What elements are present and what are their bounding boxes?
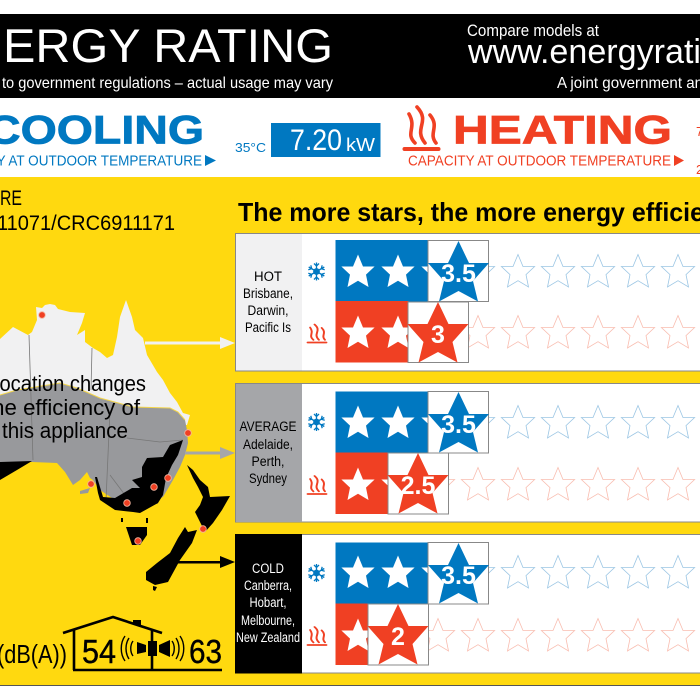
- cooling rating 3.5: [428, 240, 489, 302]
- Tasmania: [126, 527, 147, 545]
- heating heading: [408, 108, 684, 170]
- map: New Zealand: [146, 465, 230, 591]
- Bass Strait islands: [121, 518, 148, 523]
- hot zone: [0, 300, 190, 425]
- heating outline stars: [421, 468, 695, 500]
- state borders: [29, 335, 183, 505]
- cooling stars bar: [336, 240, 455, 302]
- location text: [0, 371, 146, 443]
- cold label: Hobart,: [250, 595, 286, 610]
- Kangaroo Island: [80, 488, 90, 494]
- panel: cold: [235, 534, 700, 674]
- average label: [240, 419, 296, 486]
- cooling capacity value: [235, 123, 380, 157]
- heating capacity label: CAPACITY AT OUTDOOR TEMPERATURE: [408, 153, 671, 170]
- hot label: [243, 269, 293, 335]
- north island: [187, 465, 230, 532]
- hot label: HOT: [254, 269, 282, 284]
- heating rating 2.5: [388, 453, 448, 514]
- heating temperatures cut off: [696, 124, 700, 177]
- cooling stars bar: [336, 392, 455, 453]
- icon: heat: [308, 476, 326, 494]
- heating rating 2.5: 2.5: [401, 472, 435, 500]
- outdoor noise: 63: [189, 633, 222, 670]
- cooling capacity value: 7.20: [290, 124, 342, 157]
- cold label: Canberra,: [244, 578, 292, 593]
- icon: snowflake: [308, 564, 325, 582]
- heating rating 2: [368, 604, 428, 665]
- icon: heat: [308, 627, 326, 645]
- heating stars bar: [336, 452, 415, 514]
- title: ERGY RATING: [3, 19, 333, 72]
- icon: snowflake: [308, 413, 325, 431]
- cooling rating 3.5: 3.5: [441, 411, 476, 439]
- arrow: average: [185, 447, 235, 459]
- cooling rating 3.5: [428, 392, 489, 453]
- arrow: cold: [177, 556, 235, 568]
- cold zone south east: [95, 440, 183, 513]
- heating arrow: [674, 155, 684, 166]
- average label: AVERAGE: [240, 419, 296, 434]
- heating stars bar: [336, 604, 375, 665]
- map: Australia: [0, 300, 190, 545]
- heating stars bar: [336, 301, 415, 362]
- icon: snowflake: [308, 262, 325, 280]
- location text: this appliance: [2, 418, 128, 443]
- model text: 11071/CRC6911171: [0, 212, 175, 235]
- cold label: COLD: [252, 561, 284, 576]
- cooling stars bar: [336, 542, 455, 604]
- hot label: Darwin,: [248, 303, 288, 318]
- compare models text: Compare models at: [467, 21, 599, 40]
- cooling capacity value: 35°C: [235, 140, 266, 155]
- south island: [146, 527, 197, 585]
- heating rating 3: [408, 302, 468, 362]
- indoor noise: 54: [82, 633, 116, 670]
- cooling rating 3.5: [428, 542, 489, 604]
- heating rating 2: 2: [391, 623, 405, 651]
- icon: house: [63, 617, 222, 670]
- cold label: [236, 561, 300, 645]
- cold label: New Zealand: [236, 630, 300, 645]
- heating rating 3: 3: [431, 321, 445, 349]
- panel: hot: [236, 234, 700, 371]
- heating outline stars: [461, 316, 695, 348]
- icon: heating: [404, 107, 438, 149]
- icon: speakers: [121, 636, 184, 661]
- heating heading: HEATING: [453, 108, 672, 152]
- average zone: [0, 383, 188, 510]
- hot label: Pacific Is: [245, 320, 291, 335]
- cooling outline stars: [461, 254, 695, 287]
- model text: RE: [0, 187, 22, 210]
- cold label: Melbourne,: [241, 613, 295, 628]
- location dots: [39, 312, 206, 544]
- website: www.energyrati: [467, 33, 700, 71]
- model text: [0, 187, 175, 235]
- disclaimer: to government regulations – actual usage may vary: [2, 75, 333, 92]
- yellow panel: [0, 177, 700, 685]
- cooling rating 3.5: 3.5: [441, 562, 476, 590]
- cooling rating 3.5: 3.5: [441, 260, 476, 288]
- arrow: hot: [145, 337, 235, 349]
- cooling capacity value: kW: [346, 135, 375, 155]
- cold zone south west: [0, 461, 32, 480]
- zone boundary: [0, 383, 185, 420]
- hot label: Brisbane,: [243, 286, 293, 301]
- cooling arrow: [205, 155, 216, 166]
- heating outline stars: [421, 618, 695, 651]
- cooling heading: [0, 108, 216, 170]
- average label: Adelaide,: [243, 437, 293, 452]
- Stewart Island: [153, 586, 157, 591]
- average label: Perth,: [252, 454, 284, 469]
- average label: Sydney: [249, 471, 287, 486]
- panel: average: [236, 384, 700, 522]
- cooling outline stars: [461, 556, 695, 588]
- icon: heat: [308, 324, 326, 342]
- header band: [0, 14, 700, 98]
- noise rating: [0, 617, 222, 670]
- cooling outline stars: [461, 406, 695, 438]
